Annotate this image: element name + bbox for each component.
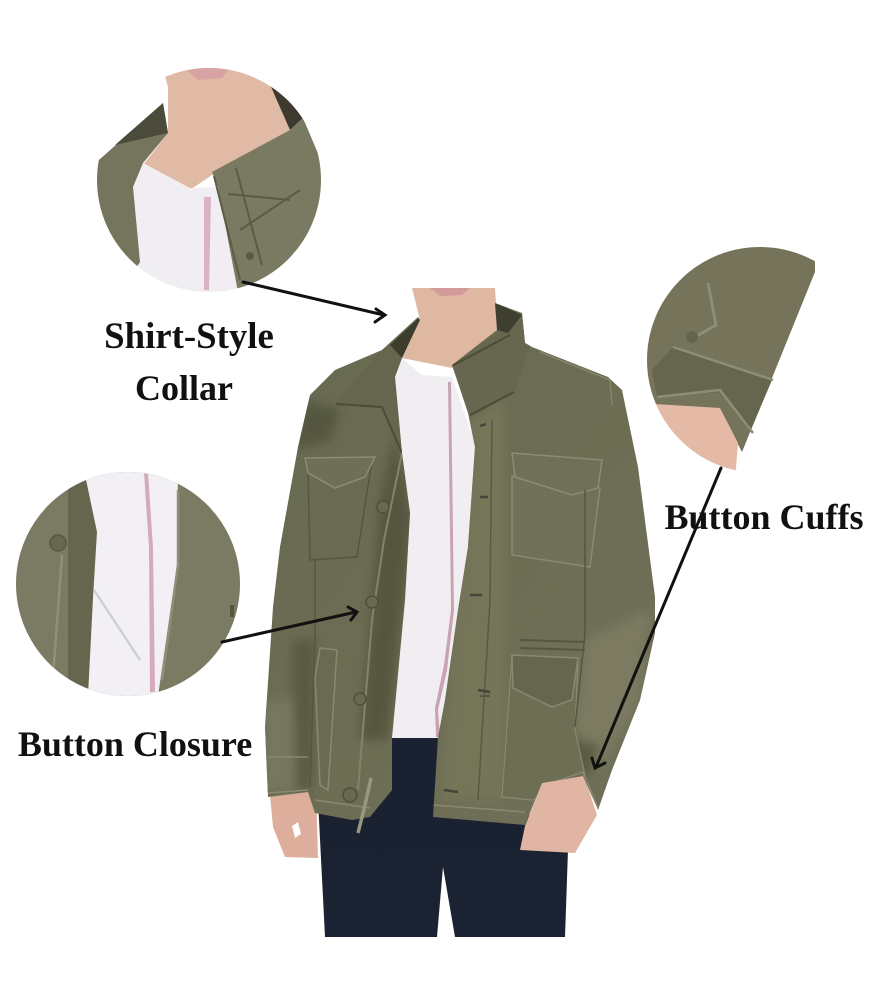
hem and cuff lines	[268, 757, 598, 812]
small tab	[230, 605, 234, 617]
placket	[690, 283, 716, 340]
jacket body	[260, 300, 660, 830]
skin	[143, 66, 292, 190]
cuff button	[686, 331, 698, 343]
shading	[262, 400, 650, 800]
label: collar second line: Collar	[135, 368, 233, 408]
right jacket	[212, 118, 325, 295]
label: button closure: Button Closure	[18, 724, 252, 764]
buttons	[343, 501, 389, 802]
jeans	[318, 738, 568, 937]
label: button cuffs: Button Cuffs	[664, 497, 864, 537]
pink stripe	[144, 472, 155, 692]
zipper pull and drawstring	[358, 778, 371, 833]
dark collar inside left	[115, 103, 168, 145]
neck and chin	[402, 288, 498, 368]
shirt	[84, 470, 178, 696]
collar inside dark right	[495, 303, 522, 333]
stripe	[204, 197, 211, 290]
pocket lower left	[315, 648, 337, 790]
label: shirt-style collar: Shirt-Style	[104, 315, 274, 356]
shirt crease	[94, 590, 140, 660]
flap upper left	[305, 457, 375, 488]
sleeve seams	[310, 490, 585, 787]
flap upper right	[512, 453, 602, 495]
placket seam	[52, 490, 178, 690]
collar stitch lines	[336, 335, 514, 453]
sleeve fabric	[640, 240, 815, 452]
darker placket	[68, 472, 97, 696]
flap lower right	[512, 655, 578, 707]
shoulder seam	[540, 352, 612, 405]
collar button	[246, 252, 254, 260]
left placket and zip	[358, 453, 402, 790]
cuff seam	[657, 347, 773, 433]
mouth	[430, 288, 470, 296]
collar right	[452, 313, 530, 417]
white t-shirt	[392, 358, 476, 738]
shirt stripe	[435, 382, 454, 737]
gap between fingers	[292, 822, 301, 838]
left hand	[270, 790, 318, 858]
snap marks	[444, 424, 490, 792]
shirt	[133, 163, 240, 292]
left jacket	[97, 103, 168, 266]
right hand	[520, 772, 597, 853]
stitching	[214, 168, 300, 280]
collar left	[382, 318, 420, 451]
mouth	[186, 68, 229, 80]
cuff shading	[652, 348, 772, 432]
arrow: closure	[222, 607, 357, 642]
hand	[640, 403, 738, 480]
pocket upper right	[512, 476, 600, 567]
main photo: man wearing olive jacket	[260, 288, 660, 937]
collar inside dark left	[390, 317, 420, 358]
pocket upper left	[308, 460, 372, 560]
right placket seam	[478, 420, 492, 800]
dark collar inside right	[270, 86, 302, 130]
pocket lower right	[502, 655, 585, 800]
detail circle: closure	[14, 470, 242, 698]
waist gathers	[480, 640, 585, 696]
closure button	[50, 535, 66, 551]
detail circle: cuff	[640, 240, 815, 480]
arrow: cuffs	[592, 468, 721, 768]
detail circle: collar	[90, 66, 325, 295]
arrow: collar	[243, 282, 385, 322]
